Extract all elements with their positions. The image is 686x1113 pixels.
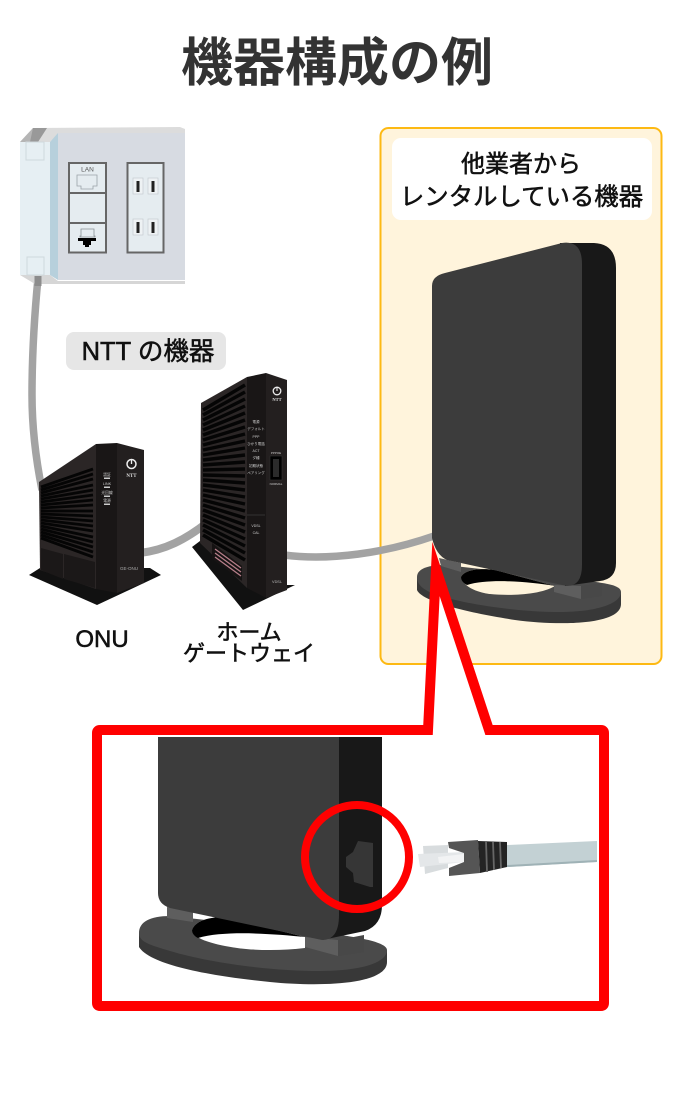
heading: rented equipment label (392, 138, 652, 220)
panel: rented equipment (380, 128, 662, 664)
label: home gateway (183, 620, 315, 666)
cable: wall to ONU (32, 278, 42, 490)
ONU status labels (101, 472, 113, 505)
icon: NTT logo on ONU: NTT (126, 474, 137, 479)
close-up router front (158, 737, 339, 940)
gateway status labels: 初期状態 (249, 463, 263, 468)
gateway switch: NORMAL (270, 482, 283, 486)
gateway status labels: ダ種 (252, 455, 260, 460)
heading: rented equipment label: 他業者から (461, 151, 581, 178)
icon: power outlet frame (128, 163, 164, 252)
device: router close-up (139, 737, 387, 984)
router front (432, 243, 582, 586)
label: ONU: ONU (75, 626, 129, 653)
close-up router side (322, 737, 382, 940)
close-up LAN port (346, 841, 373, 887)
device: home gateway (192, 373, 295, 610)
cable: gateway to router (284, 536, 434, 557)
icon: LAN jack frame: LAN (81, 166, 94, 174)
gateway status labels: PPP (252, 435, 260, 439)
device: rented router (417, 243, 621, 623)
router side (560, 243, 616, 586)
cable jacket (507, 841, 597, 867)
ONU status labels: 認証 (103, 472, 111, 477)
gateway switch (270, 451, 283, 486)
icon: NTT logo on gateway: NTT (272, 397, 282, 402)
ONU vent louvres (41, 469, 93, 557)
gateway status labels: ACT (252, 449, 260, 453)
gateway status labels: 電源 (252, 419, 260, 424)
heading: NTT equipment label: NTT の機器 (82, 338, 214, 366)
close-up stand (139, 907, 387, 984)
label: home gateway: ゲートウェイ (183, 641, 315, 666)
ONU status labels: 光回線 (101, 490, 113, 495)
gateway status labels: VDSL (251, 524, 261, 528)
gateway status labels: ひかり電話 (247, 441, 265, 446)
device: home gateway: VDSL (272, 580, 282, 584)
gateway vent louvres (203, 385, 245, 560)
gateway switch: PPPOE (271, 451, 281, 455)
highlight circle (305, 805, 409, 909)
ONU status labels: 電源 (103, 498, 111, 503)
gateway status labels: CAL (253, 531, 259, 535)
icon: LAN cable plug (418, 840, 597, 876)
cable stub at wall plate (34, 276, 42, 286)
title: 機器構成の例 (181, 35, 493, 93)
icon: NTT logo on gateway (272, 387, 282, 402)
callout: red zoom frame (97, 569, 604, 1006)
strain relief (478, 841, 507, 873)
icon: wall outlet plate (20, 127, 185, 284)
heading: NTT equipment label (66, 332, 226, 370)
icon: NTT logo on ONU (126, 459, 137, 479)
heading: rented equipment label: レンタルしている機器 (400, 184, 643, 211)
icon: LAN jack frame (69, 163, 106, 252)
label: home gateway: ホーム (216, 620, 282, 645)
gateway status labels (247, 419, 265, 535)
gateway pink vents (215, 549, 241, 576)
gateway status labels: ペアリング (247, 470, 265, 475)
router stand (417, 558, 621, 623)
ONU status labels: LINK (103, 482, 112, 486)
device: ONU: GE-ONU (120, 566, 138, 571)
gateway status labels: デフォルト (247, 426, 265, 431)
cable: ONU to gateway (140, 522, 208, 553)
device: ONU (29, 443, 161, 605)
